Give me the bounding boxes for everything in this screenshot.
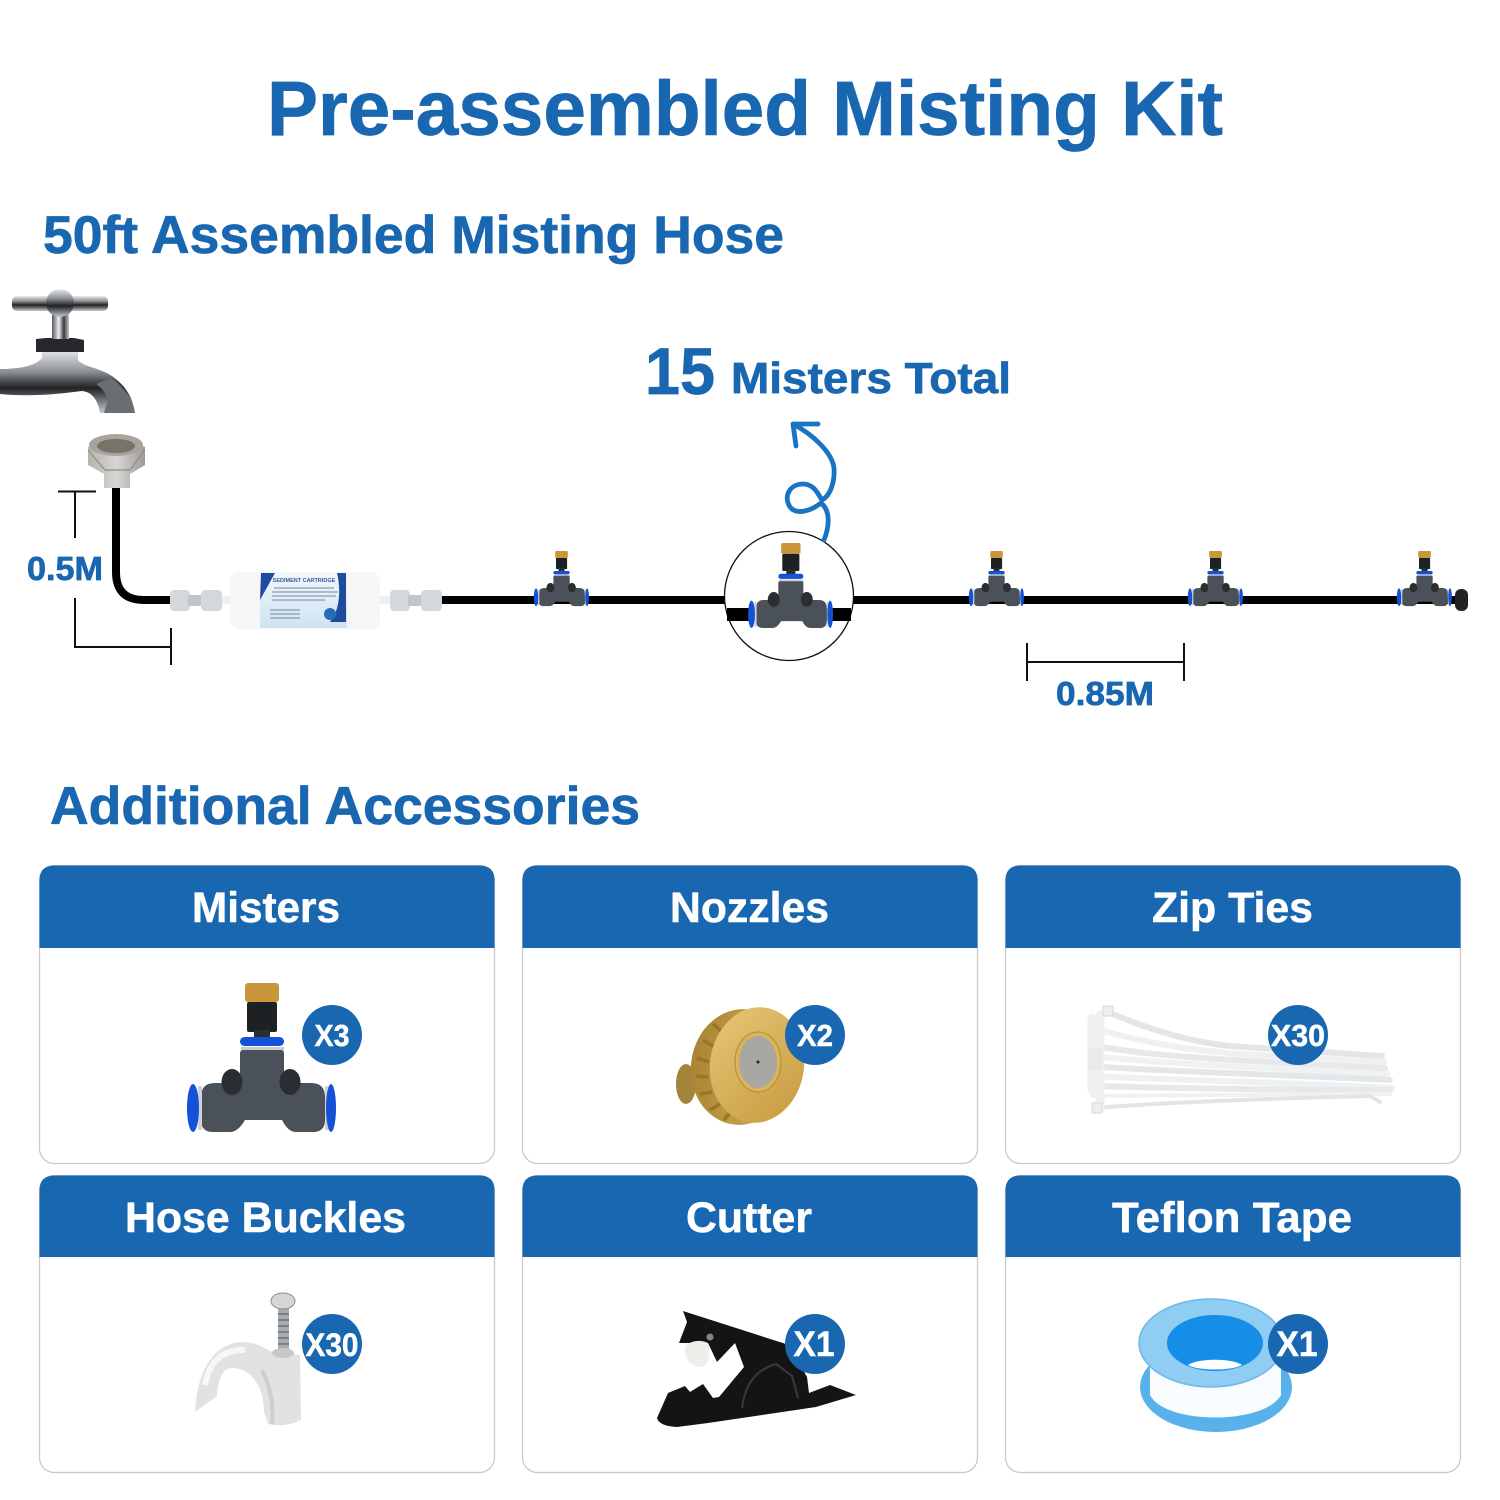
badge: quantity: X30 <box>306 1327 358 1363</box>
header text: Cutter <box>686 1194 812 1242</box>
panel: hose buckles <box>40 1176 494 1472</box>
header text: Teflon Tape <box>1112 1194 1352 1242</box>
badge: quantity <box>785 1314 845 1374</box>
badge: quantity: X1 <box>794 1325 834 1364</box>
arrow: curly callout <box>787 424 834 540</box>
fitting: left connector <box>170 590 230 611</box>
icon: brass nozzle <box>676 1001 812 1131</box>
badge: quantity: X1 <box>1276 1325 1318 1364</box>
mister 3 <box>969 551 1024 606</box>
panel: cutter <box>522 1176 978 1472</box>
icon: mister <box>187 983 336 1132</box>
panel: zip ties <box>1006 866 1460 1164</box>
icon: faucet <box>0 289 135 413</box>
header text: Hose Buckles <box>125 1194 406 1242</box>
header text: Misters <box>192 884 340 932</box>
hose: main line <box>116 488 1458 604</box>
icon: hose connector nut <box>88 434 145 488</box>
callout circle with enlarged mister <box>724 532 854 660</box>
badge: quantity <box>302 1314 362 1374</box>
header text: Nozzles <box>670 884 829 932</box>
misters total label: 15 <box>645 334 715 408</box>
header text: Zip Ties <box>1152 884 1313 932</box>
label text: SEDIMENT CARTRIDGE <box>273 578 336 584</box>
badge: quantity <box>785 1005 845 1065</box>
dimension: 0.5M <box>27 492 171 665</box>
misters total label: Misters Total <box>731 354 1011 403</box>
badge: quantity: X2 <box>797 1018 833 1053</box>
title: Pre-assembled Misting Kit <box>267 66 1223 152</box>
dimension: 0.5M: 0.5M <box>27 550 103 587</box>
panel: teflon tape <box>1006 1176 1460 1472</box>
panel: misters <box>40 866 494 1164</box>
hose end plug <box>1455 589 1468 611</box>
icon: nail clip <box>195 1293 301 1425</box>
mister 5 <box>1397 551 1452 606</box>
icon: tape roll <box>1139 1299 1292 1432</box>
badge: quantity: X3 <box>314 1018 350 1053</box>
fitting: right connector <box>380 590 442 611</box>
icon: tube cutter <box>657 1311 856 1427</box>
mister 1 <box>534 551 589 606</box>
badge: quantity <box>1268 1314 1328 1374</box>
badge: quantity: X30 <box>1271 1018 1325 1053</box>
dimension: 0.85M <box>1027 643 1184 712</box>
filter cartridge <box>230 572 380 629</box>
badge: quantity <box>1268 1005 1328 1065</box>
mister 4 <box>1188 551 1243 606</box>
heading: assembled hose: 50ft Assembled Misting Hose <box>43 206 784 265</box>
badge: quantity <box>302 1005 362 1065</box>
heading: additional accessories: Additional Accessories <box>50 777 640 836</box>
panel: nozzles <box>522 866 978 1164</box>
misters total label <box>645 334 1011 408</box>
icon: bundle of zip ties <box>1088 1006 1392 1113</box>
dimension: 0.85M: 0.85M <box>1056 675 1154 712</box>
